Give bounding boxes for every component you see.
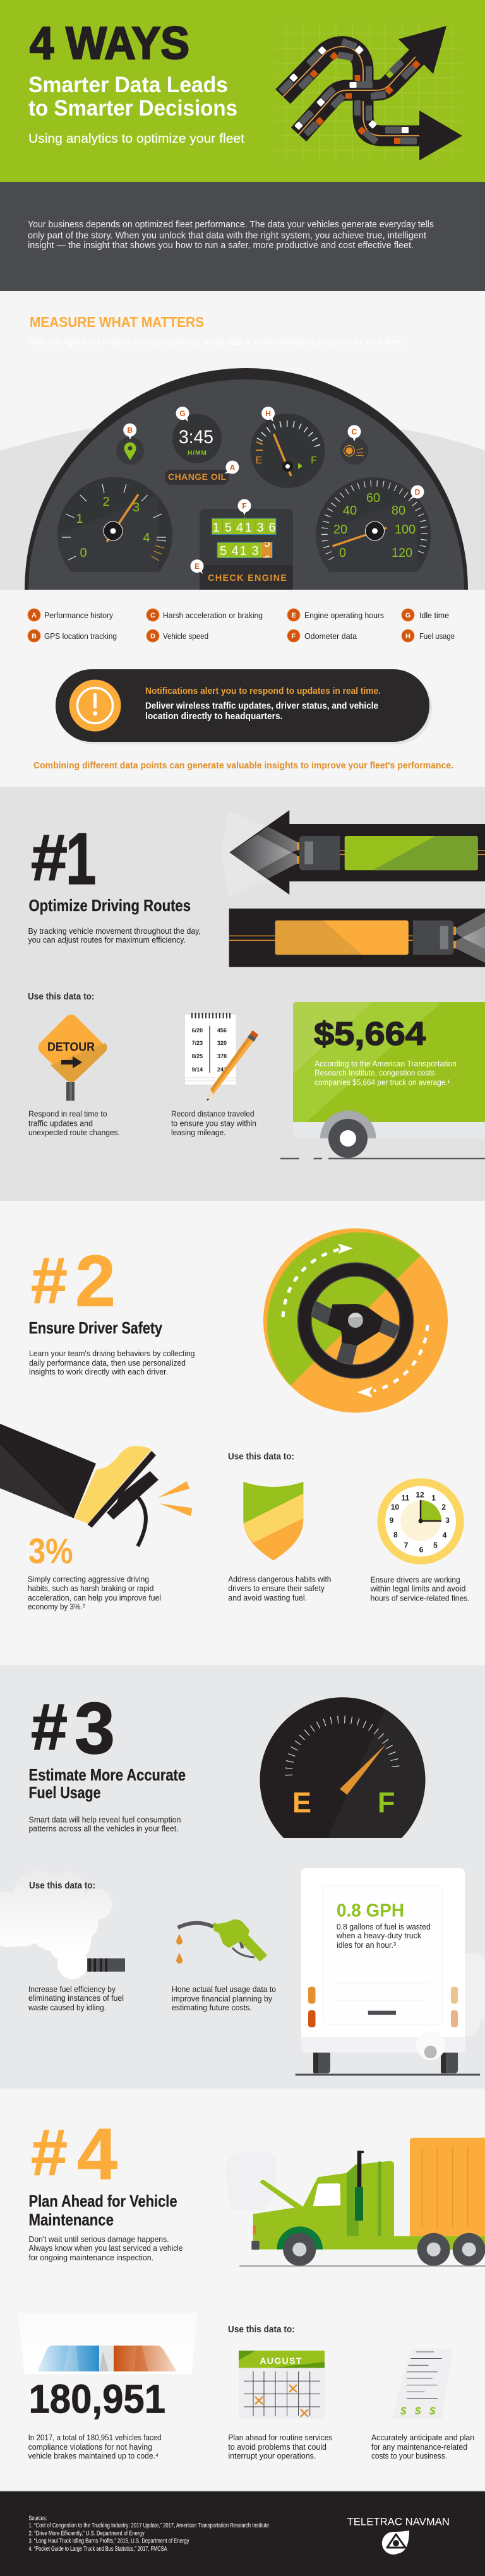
illustration: truck with open hood	[225, 2138, 485, 2266]
legend: Performance history	[44, 611, 113, 620]
panel: section 1	[0, 787, 485, 1201]
icon: clock: 4	[443, 1530, 447, 1539]
sources: 3. “Long Haul Truck Idling Burns Profits,” 2015, U.S. Department of Energy	[29, 2538, 189, 2545]
section 1 text	[28, 926, 201, 945]
speedometer gauge: 100	[395, 523, 416, 537]
legend: Vehicle speed	[163, 631, 208, 641]
callout markers	[123, 407, 424, 574]
illustration: fuel gauge	[260, 1697, 426, 1838]
stat description	[336, 1922, 431, 1950]
legend: Odometer data	[304, 631, 357, 641]
stat description: In 2017, a total of 180,951 vehicles faced	[28, 2433, 162, 2442]
text: increase fuel efficiency	[28, 1984, 124, 2012]
text: anticipate costs: Accurately anticipate and plan	[371, 2433, 474, 2442]
section 4 text	[29, 2234, 183, 2262]
stat description: when a heavy-duty truck	[336, 1931, 421, 1940]
icon: clock: 5	[433, 1541, 438, 1549]
use this data heading: Use this data to:	[228, 2324, 295, 2335]
callout text: location directly to headquarters.	[145, 712, 283, 722]
heading: measure what matters: MEASURE WHAT MATTERS	[30, 314, 204, 330]
text: hone fuel usage: estimating future costs.	[172, 2003, 252, 2012]
title: 4 ways: 4 WAYS	[30, 18, 189, 69]
illustration: exhaust smoke	[0, 1870, 125, 1979]
icon: mileage notepad and pencil: 8/25	[192, 1053, 203, 1059]
illustration: truck rear with stat	[296, 1868, 485, 2075]
illustration: siren light	[18, 2313, 197, 2374]
intro text: only part of the story. When you unlock that data with the right system, you achieve true, intelligent	[28, 230, 427, 241]
intro text	[28, 219, 434, 251]
legend: A	[32, 612, 37, 619]
speedometer gauge	[316, 477, 431, 572]
stat: 3%: 3%	[28, 1531, 73, 1571]
odometer panel: 154136	[212, 521, 276, 535]
section 1 text: By tracking vehicle movement throughout the day,	[28, 926, 201, 936]
text: address habits: drivers to ensure their safety	[228, 1583, 325, 1593]
sources: 4. “Pocket Guide to Large Truck and Bus Statistics,” 2017, FMCSA	[29, 2546, 167, 2553]
section 4 text: Always know when you last serviced a vehicle	[29, 2243, 183, 2253]
callout markers: F	[242, 501, 247, 510]
legend: D	[150, 633, 155, 640]
icon: clock: 11	[402, 1494, 410, 1503]
heading	[29, 1765, 186, 1802]
stat: 0.8 GPH: 0.8 GPH	[337, 1900, 404, 1921]
clock display: H/MM	[188, 450, 207, 457]
callout: notifications pill	[56, 669, 432, 744]
legend: F	[292, 633, 296, 640]
text: respond in real time	[28, 1109, 120, 1137]
icon: mileage notepad and pencil	[185, 1013, 258, 1101]
text: increase fuel efficiency: Increase fuel efficiency by	[28, 1984, 116, 1994]
icon: detour sign	[35, 1011, 107, 1101]
icon: clock: 7	[404, 1541, 409, 1549]
icon: fuel nozzle	[176, 1919, 266, 1964]
text: hone fuel usage	[172, 1984, 276, 2012]
clock display	[172, 414, 222, 463]
fuel gauge small	[250, 414, 325, 488]
icon: mileage notepad and pencil: 241	[217, 1066, 227, 1073]
number 1: #	[31, 821, 68, 895]
icon: clock: 2	[441, 1503, 446, 1512]
legend: C	[150, 612, 155, 619]
text: legal limits	[370, 1575, 469, 1602]
illustration: merging road arrows	[275, 21, 462, 161]
speedometer gauge: 40	[343, 504, 357, 518]
text: record distance	[171, 1109, 256, 1137]
callout markers: E	[195, 562, 200, 571]
speedometer gauge: 60	[366, 491, 380, 505]
heading: Maintenance	[29, 2210, 114, 2229]
title: subtitle: to Smarter Decisions	[28, 96, 237, 121]
text: address habits	[228, 1575, 331, 1602]
number 2: 2	[75, 1241, 116, 1321]
stat description: habits, such as harsh braking or rapid	[28, 1583, 153, 1593]
legend: GPS location tracking	[44, 631, 117, 641]
legend: B	[32, 633, 37, 640]
text: respond in real time: unexpected route changes.	[28, 1128, 120, 1137]
text: record distance: Record distance traveled	[171, 1109, 254, 1119]
stat description: Simply correcting aggressive driving	[28, 1575, 149, 1583]
stat description: economy by 3%.²	[28, 1602, 85, 1611]
text: respond in real time: traffic updates and	[28, 1119, 93, 1128]
use this data heading: Use this data to:	[28, 991, 94, 1002]
section 2 text: insights to work directly with each driver.	[29, 1367, 168, 1376]
text: plan ahead: interrupt your operations.	[228, 2451, 316, 2460]
text: hone fuel usage: Hone actual fuel usage data to	[172, 1984, 276, 1994]
intro text: Your business depends on optimized fleet performance. The data your vehicles generate everyday tells	[28, 219, 434, 230]
text: increase fuel efficiency: eliminating instances of fuel	[28, 1993, 124, 2003]
intro text: insight — the insight that shows you how to run a safer, more productive and cost effective fleet.	[28, 240, 414, 251]
text: record distance: to ensure you stay within	[171, 1119, 256, 1128]
text: address habits: and avoid wasting fuel.	[228, 1593, 307, 1602]
legend: G	[405, 612, 410, 619]
stat description: According to the American Transportation	[314, 1059, 457, 1068]
callout markers: B	[127, 426, 133, 434]
section 3 text: Smart data will help reveal fuel consumption	[29, 1815, 181, 1824]
text: anticipate costs	[371, 2433, 474, 2460]
section 3 text	[29, 1815, 181, 1834]
legend: Harsh acceleration or braking	[163, 611, 263, 620]
callout markers: H	[265, 409, 271, 418]
panel: header	[0, 0, 485, 182]
text: anticipate costs: for any maintenance-related	[371, 2442, 467, 2452]
section 4 text: for ongoing maintenance inspection.	[29, 2253, 153, 2262]
icon: alert	[69, 679, 121, 731]
icon: calendar	[239, 2351, 325, 2419]
title: subtitle	[28, 73, 237, 121]
illustration: truck with stat	[280, 1002, 485, 1159]
icon: mileage notepad and pencil: 456	[217, 1027, 227, 1034]
icon: clock: 12	[416, 1490, 424, 1499]
tagline: Using analytics to optimize your fleet	[28, 132, 244, 146]
illustration: foot on pedal	[0, 1424, 193, 1546]
text: plan ahead: Plan ahead for routine services	[228, 2433, 333, 2442]
harsh braking icon	[340, 437, 368, 465]
stat description: Research Institute, congestion costs	[314, 1068, 435, 1077]
speedometer gauge: 120	[392, 546, 412, 560]
stat description: 0.8 gallons of fuel is wasted	[337, 1922, 431, 1931]
sources	[29, 2515, 269, 2553]
number 4: #	[31, 2116, 68, 2190]
sources: Sources:	[29, 2515, 47, 2522]
subheading: With the right tools in place you can generate smart data to make intelligent decisions for your fleet.	[30, 337, 404, 347]
stat description: vehicle brakes maintained up to code.⁴	[28, 2451, 159, 2460]
icon: mileage notepad and pencil: 378	[217, 1053, 227, 1059]
clock display: 3:45	[179, 427, 213, 448]
icon: mileage notepad and pencil: 7/23	[192, 1040, 203, 1046]
odometer panel: 6	[264, 554, 270, 566]
text: anticipate costs: costs to your business.	[371, 2451, 447, 2460]
stat description	[314, 1059, 457, 1087]
icon: clock: 3	[445, 1516, 450, 1525]
illustration: steering wheel	[263, 1229, 448, 1413]
logo wordmark: TELETRAC NAVMAN	[347, 2516, 450, 2528]
heading: Optimize Driving Routes	[29, 896, 191, 915]
icon: budget document	[392, 2349, 453, 2419]
icon: detour sign: DETOUR	[47, 1041, 95, 1054]
section 2 text: daily performance data, then use personalized	[29, 1358, 186, 1368]
icon: mileage notepad and pencil: 320	[217, 1040, 227, 1046]
tachometer gauge	[57, 477, 172, 572]
icon: clock: 1	[431, 1494, 436, 1503]
speedometer gauge: 80	[392, 504, 405, 518]
heading: Ensure Driver Safety	[29, 1318, 162, 1337]
number 4: 4	[77, 2114, 117, 2195]
text: respond in real time: Respond in real time to	[28, 1109, 107, 1119]
icon: clock: 9	[390, 1516, 394, 1525]
number 1: 1	[66, 818, 96, 900]
change oil light	[165, 470, 229, 485]
text: record distance: leasing mileage.	[171, 1128, 226, 1137]
text: legal limits: Ensure drivers are working	[371, 1575, 460, 1584]
text: plan ahead	[228, 2433, 333, 2460]
use this data heading: Use this data to:	[228, 1452, 294, 1462]
stat: $5,664: $5,664	[314, 1016, 426, 1052]
fuel gauge small: E	[256, 455, 262, 466]
section 4 text: Don't wait until serious damage happens.	[29, 2234, 169, 2244]
text: address habits: Address dangerous habits with	[228, 1575, 331, 1583]
sources: 1. “Cost of Congestion to the Trucking Industry: 2017 Update,” 2017, American Transportation Research Institute	[29, 2522, 269, 2529]
stat description	[28, 2433, 162, 2460]
text: hone fuel usage: improve financial planning by	[172, 1994, 272, 2003]
section 3 text: patterns across all the vehicles in your fleet.	[29, 1823, 178, 1834]
odometer panel: 5413	[220, 544, 259, 558]
section 2 text: Learn your team's driving behaviors by collecting	[29, 1349, 195, 1358]
icon: shield	[243, 1482, 303, 1561]
panel: section 2	[0, 1229, 469, 1611]
icon: mileage notepad and pencil: 9/14	[192, 1066, 203, 1073]
callout markers: C	[352, 427, 357, 436]
heading: Plan Ahead for Vehicle	[29, 2191, 177, 2210]
callout text: Notifications alert you to respond to updates in real time.	[145, 686, 381, 696]
text: legal limits: within legal limits and avoid	[370, 1584, 466, 1594]
legend: E	[291, 612, 296, 619]
speedometer gauge: 20	[333, 523, 347, 537]
illustration: fuel gauge: E	[292, 1787, 311, 1819]
section 1 text: you can adjust routes for maximum efficiency.	[28, 935, 186, 945]
icon: clock: 6	[419, 1546, 424, 1554]
icon: mileage notepad and pencil: 6/20	[192, 1027, 203, 1034]
combining data statement: Combining different data points can generate valuable insights to improve your fleet's performance.	[33, 760, 453, 771]
callout markers: D	[415, 487, 421, 496]
panel: section 3	[0, 1665, 485, 2089]
odometer panel	[200, 509, 293, 590]
stat description: compliance violations for not having	[28, 2442, 152, 2452]
callout markers: A	[230, 463, 236, 472]
icon: clock: 8	[393, 1530, 398, 1539]
title: subtitle: Smarter Data Leads	[28, 73, 228, 97]
tachometer gauge: 01234	[76, 495, 150, 560]
icon: budget document: $$$	[400, 2405, 436, 2417]
panel: section 4	[18, 2114, 485, 2460]
text: legal limits: hours of service-related fines.	[371, 1594, 469, 1602]
stat description	[28, 1575, 161, 1611]
fuel gauge small: F	[311, 455, 317, 466]
text: plan ahead: to avoid problems that could	[228, 2442, 326, 2452]
heading: Estimate More Accurate	[29, 1765, 186, 1784]
number 3: 3	[75, 1688, 115, 1769]
number 2: #	[31, 1244, 68, 1318]
callout markers: G	[179, 409, 186, 418]
icon: calendar: AUGUST	[260, 2356, 302, 2366]
check engine light: CHECK ENGINE	[208, 573, 287, 583]
logo mark	[382, 2531, 409, 2555]
number 1	[31, 818, 96, 900]
panel: intro	[0, 182, 485, 291]
dashboard illustration	[0, 368, 485, 590]
use this data heading: Use this data to:	[29, 1880, 95, 1891]
text: increase fuel efficiency: waste caused by idling.	[28, 2003, 106, 2012]
stat: 180,951: 180,951	[29, 2376, 165, 2422]
legend: Idle time	[419, 611, 449, 620]
illustration: fuel gauge: F	[378, 1787, 395, 1819]
stat description: idles for an hour.³	[337, 1940, 397, 1950]
number 3: #	[31, 1691, 68, 1764]
icon: clock: 10	[391, 1503, 399, 1512]
illustration: road with trucks	[221, 810, 485, 967]
change oil light: CHANGE OIL	[168, 472, 226, 482]
legend: H	[405, 633, 410, 640]
icon: clock	[377, 1478, 464, 1565]
stat description: acceleration, can help you improve fuel	[28, 1593, 161, 1602]
footer	[0, 2491, 485, 2576]
heading: Fuel Usage	[29, 1783, 101, 1802]
legend	[28, 609, 455, 642]
speedometer gauge: 0	[339, 546, 346, 560]
stat description: companies $5,664 per truck on average.¹	[314, 1077, 450, 1087]
section 2 text	[29, 1349, 195, 1376]
callout text	[145, 686, 381, 722]
heading	[29, 2191, 177, 2229]
gps icon	[116, 437, 144, 465]
callout text: Deliver wireless traffic updates, driver status, and vehicle	[145, 701, 378, 711]
odometer panel: 5	[264, 537, 270, 549]
sources: 2. “Drive More Efficiently,” U.S. Department of Energy	[29, 2531, 145, 2537]
legend: Fuel usage	[419, 631, 455, 641]
legend: Engine operating hours	[304, 611, 384, 620]
